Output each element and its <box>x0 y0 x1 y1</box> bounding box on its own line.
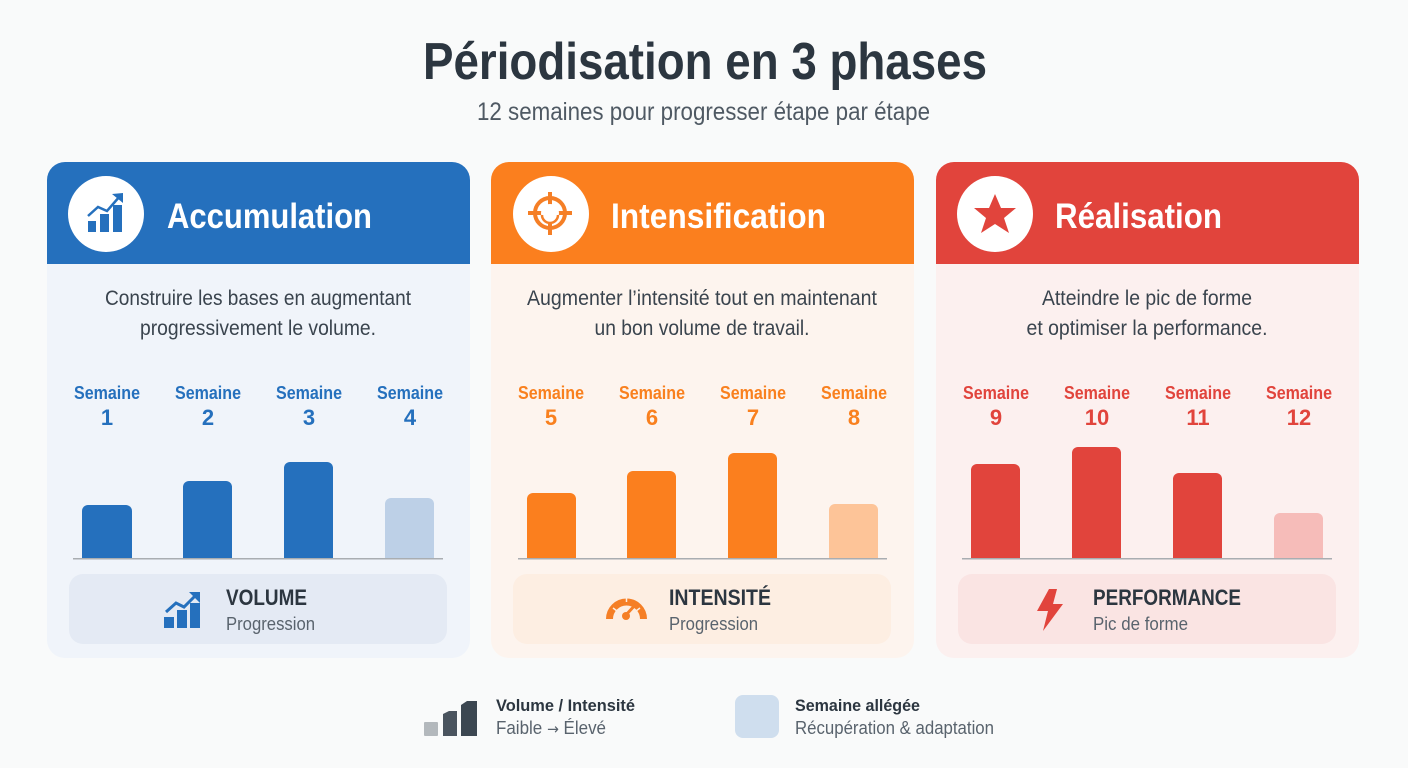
stat sublabel: Progression <box>226 614 315 634</box>
icon: gauge <box>610 597 644 620</box>
bar chart: weeks 9-12 <box>962 447 1332 560</box>
header: Intensification <box>491 162 914 264</box>
bar chart: weeks 5-8 <box>518 453 887 560</box>
week labels: 8 <box>848 405 860 430</box>
week labels <box>518 383 887 430</box>
week labels <box>74 383 443 430</box>
stat box: intensity <box>513 574 891 644</box>
stat label: INTENSITÉ <box>669 585 771 610</box>
week labels: 7 <box>747 405 759 430</box>
bar chart: weeks 1-4 <box>73 462 443 560</box>
description: Atteindre le pic de forme <box>1042 287 1252 310</box>
legend label: Semaine allégée <box>795 696 920 715</box>
legend: volume / intensity <box>424 696 635 738</box>
week labels: 12 <box>1287 405 1311 430</box>
week labels: 5 <box>545 405 557 430</box>
week labels: Semaine <box>1266 383 1332 403</box>
panel: Intensification <box>491 162 914 658</box>
stat sublabel: Pic de forme <box>1093 614 1188 634</box>
panel: Réalisation <box>936 162 1359 658</box>
description: Construire les bases en augmentant <box>105 287 411 310</box>
description: progressivement le volume. <box>140 317 376 340</box>
icon: ascending bars <box>424 701 477 736</box>
panel: Accumulation <box>47 162 470 658</box>
week labels: Semaine <box>821 383 887 403</box>
week labels: Semaine <box>619 383 685 403</box>
subtitle: 12 semaines pour progresser étape par étape <box>477 98 930 126</box>
week labels: 4 <box>404 405 417 430</box>
stat box: volume <box>69 574 447 644</box>
week labels: 1 <box>101 405 113 430</box>
heading: Accumulation: Accumulation <box>167 197 372 236</box>
heading: Intensification: Intensification <box>611 197 826 236</box>
week labels: 3 <box>303 405 315 430</box>
icon: lightning bolt <box>1037 589 1063 631</box>
week labels: Semaine <box>175 383 241 403</box>
week labels: Semaine <box>74 383 140 403</box>
icon: target <box>513 176 589 252</box>
week labels: Semaine <box>377 383 443 403</box>
legend sublabel: Faible → Élevé <box>496 718 606 738</box>
description: Augmenter l’intensité tout en maintenant <box>527 287 877 310</box>
legend: light week <box>735 695 994 738</box>
icon: growth chart <box>68 176 144 252</box>
description: un bon volume de travail. <box>594 317 810 340</box>
week labels: Semaine <box>1165 383 1231 403</box>
icon: volume growth <box>164 592 200 628</box>
description <box>105 287 411 340</box>
week labels: Semaine <box>518 383 584 403</box>
week labels: Semaine <box>1064 383 1130 403</box>
header: Accumulation <box>47 162 470 264</box>
legend label: Volume / Intensité <box>496 696 635 715</box>
week labels <box>963 383 1332 430</box>
legend sublabel: Récupération & adaptation <box>795 718 994 738</box>
stat box: performance <box>958 574 1336 644</box>
description: et optimiser la performance. <box>1026 317 1268 340</box>
week labels: Semaine <box>963 383 1029 403</box>
week labels: 10 <box>1085 405 1109 430</box>
description <box>1026 287 1268 340</box>
title: Périodisation en 3 phases <box>423 33 987 91</box>
description <box>527 287 877 340</box>
swatch <box>735 695 779 738</box>
week labels: Semaine <box>276 383 342 403</box>
week labels: 9 <box>990 405 1002 430</box>
stat label: PERFORMANCE <box>1093 585 1241 610</box>
header: Réalisation <box>936 162 1359 264</box>
stat sublabel: Progression <box>669 614 758 634</box>
heading: Réalisation: Réalisation <box>1055 197 1222 236</box>
week labels: Semaine <box>720 383 786 403</box>
week labels: 6 <box>646 405 658 430</box>
icon: star <box>957 176 1033 252</box>
week labels: 2 <box>202 405 214 430</box>
stat label: VOLUME <box>226 585 307 610</box>
week labels: 11 <box>1186 405 1210 430</box>
